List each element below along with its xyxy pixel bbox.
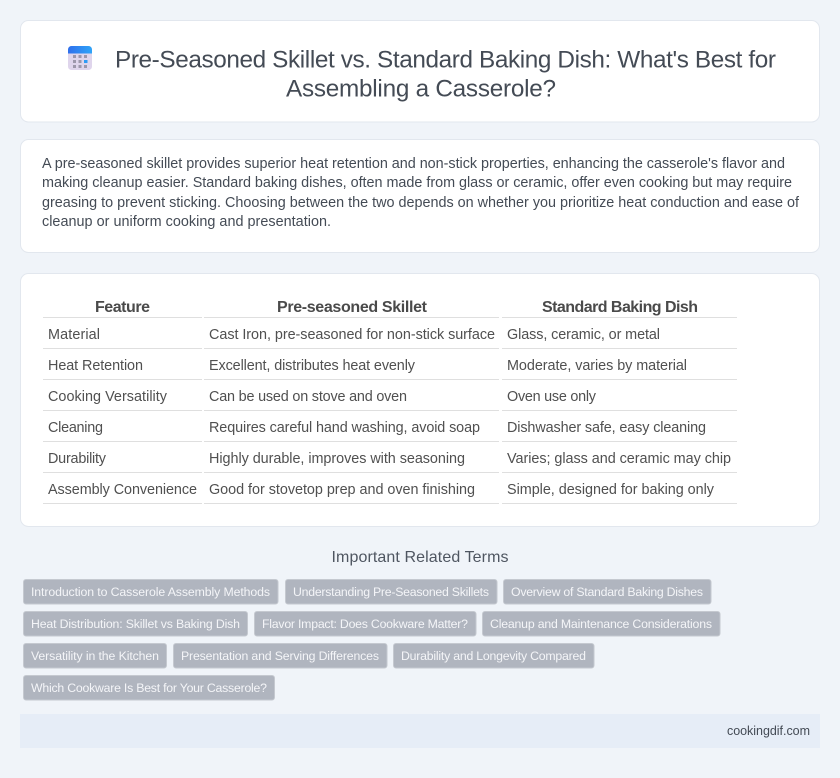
row: heat retention: [48, 358, 687, 374]
intro paragraph text: cleanup or uniform cooking and presentation.: [42, 214, 331, 230]
intro paragraph text: greasing to prevent sticking. Choosing between the two depends on whether you prioritize heat conduction and ease of: [42, 195, 800, 211]
row: durability: Durability: [48, 451, 107, 467]
tag: [482, 612, 720, 636]
tag: [24, 612, 248, 636]
tag: Cleanup and Maintenance Considerations: [490, 617, 712, 631]
row: cooking versatility: [48, 389, 597, 405]
row: durability: Highly durable, improves with seasoning: [209, 451, 465, 467]
tag: Overview of Standard Baking Dishes: [511, 585, 703, 599]
row: cooking versatility: Cooking Versatility: [48, 389, 168, 405]
intro paragraph text: A pre-seasoned skillet provides superior heat retention and non-stick properties, enhancing the casserole's flavor and: [42, 156, 785, 172]
row: durability: Varies; glass and ceramic may chip: [507, 451, 731, 467]
table header row: Pre-seasoned Skillet: [277, 299, 428, 316]
row: assembly convenience: Assembly Convenience: [48, 482, 197, 498]
row: durability: [48, 451, 731, 467]
table header row: Standard Baking Dish: [542, 299, 698, 316]
footer bar: [20, 714, 820, 748]
intro paragraph panel: [20, 140, 820, 252]
title: Pre-Seasoned Skillet vs. Standard Baking Dish: What's Best for: [115, 46, 776, 74]
intro paragraph text: making cleanup easier. Standard baking dishes, often made from glass or ceramic, offer even cooking but may require: [42, 175, 792, 191]
tag: [24, 644, 166, 668]
tag: [504, 580, 711, 604]
header panel: [20, 20, 820, 122]
row: material: Material: [48, 327, 100, 343]
tag: [24, 676, 274, 700]
row: cooking versatility: Can be used on stove and oven: [209, 389, 407, 405]
row: cleaning: Cleaning: [48, 420, 103, 436]
comparison table panel: [20, 274, 820, 526]
row: cooking versatility: Oven use only: [507, 389, 597, 405]
footer source text: cookingdif.com: [727, 724, 810, 738]
tag: [174, 644, 387, 668]
row: cleaning: Requires careful hand washing, avoid soap: [209, 420, 480, 436]
tag: Flavor Impact: Does Cookware Matter?: [262, 617, 468, 631]
tag: Heat Distribution: Skillet vs Baking Dish: [31, 617, 240, 631]
row: assembly convenience: Good for stovetop prep and oven finishing: [209, 482, 475, 498]
row: heat retention: Excellent, distributes heat evenly: [209, 358, 416, 374]
row: heat retention: Heat Retention: [48, 358, 143, 374]
tag: Understanding Pre-Seasoned Skillets: [293, 585, 489, 599]
row: material: Cast Iron, pre-seasoned for non-stick surface: [209, 327, 495, 343]
row: cleaning: Dishwasher safe, easy cleaning: [507, 420, 706, 436]
row: assembly convenience: [48, 482, 715, 498]
table header row: Feature: [95, 299, 150, 316]
tag: Presentation and Serving Differences: [181, 649, 379, 663]
tag: Which Cookware Is Best for Your Casserole?: [31, 681, 267, 695]
tag: Versatility in the Kitchen: [31, 649, 159, 663]
icon: calendar: [68, 46, 92, 70]
related terms tags: [24, 580, 720, 700]
tag: [394, 644, 594, 668]
tag: Introduction to Casserole Assembly Methods: [31, 585, 270, 599]
tag: [254, 612, 476, 636]
tag: [286, 580, 497, 604]
related terms heading: Important Related Terms: [332, 549, 508, 566]
row: heat retention: Moderate, varies by material: [507, 358, 687, 374]
tag: Durability and Longevity Compared: [401, 649, 586, 663]
title: Assembling a Casserole?: [286, 76, 556, 102]
row: material: Glass, ceramic, or metal: [507, 327, 660, 343]
row: assembly convenience: Simple, designed for baking only: [507, 482, 715, 498]
table header row: [95, 299, 698, 316]
row: material: [48, 327, 660, 343]
row: cleaning: [48, 420, 706, 436]
tag: [24, 580, 278, 604]
